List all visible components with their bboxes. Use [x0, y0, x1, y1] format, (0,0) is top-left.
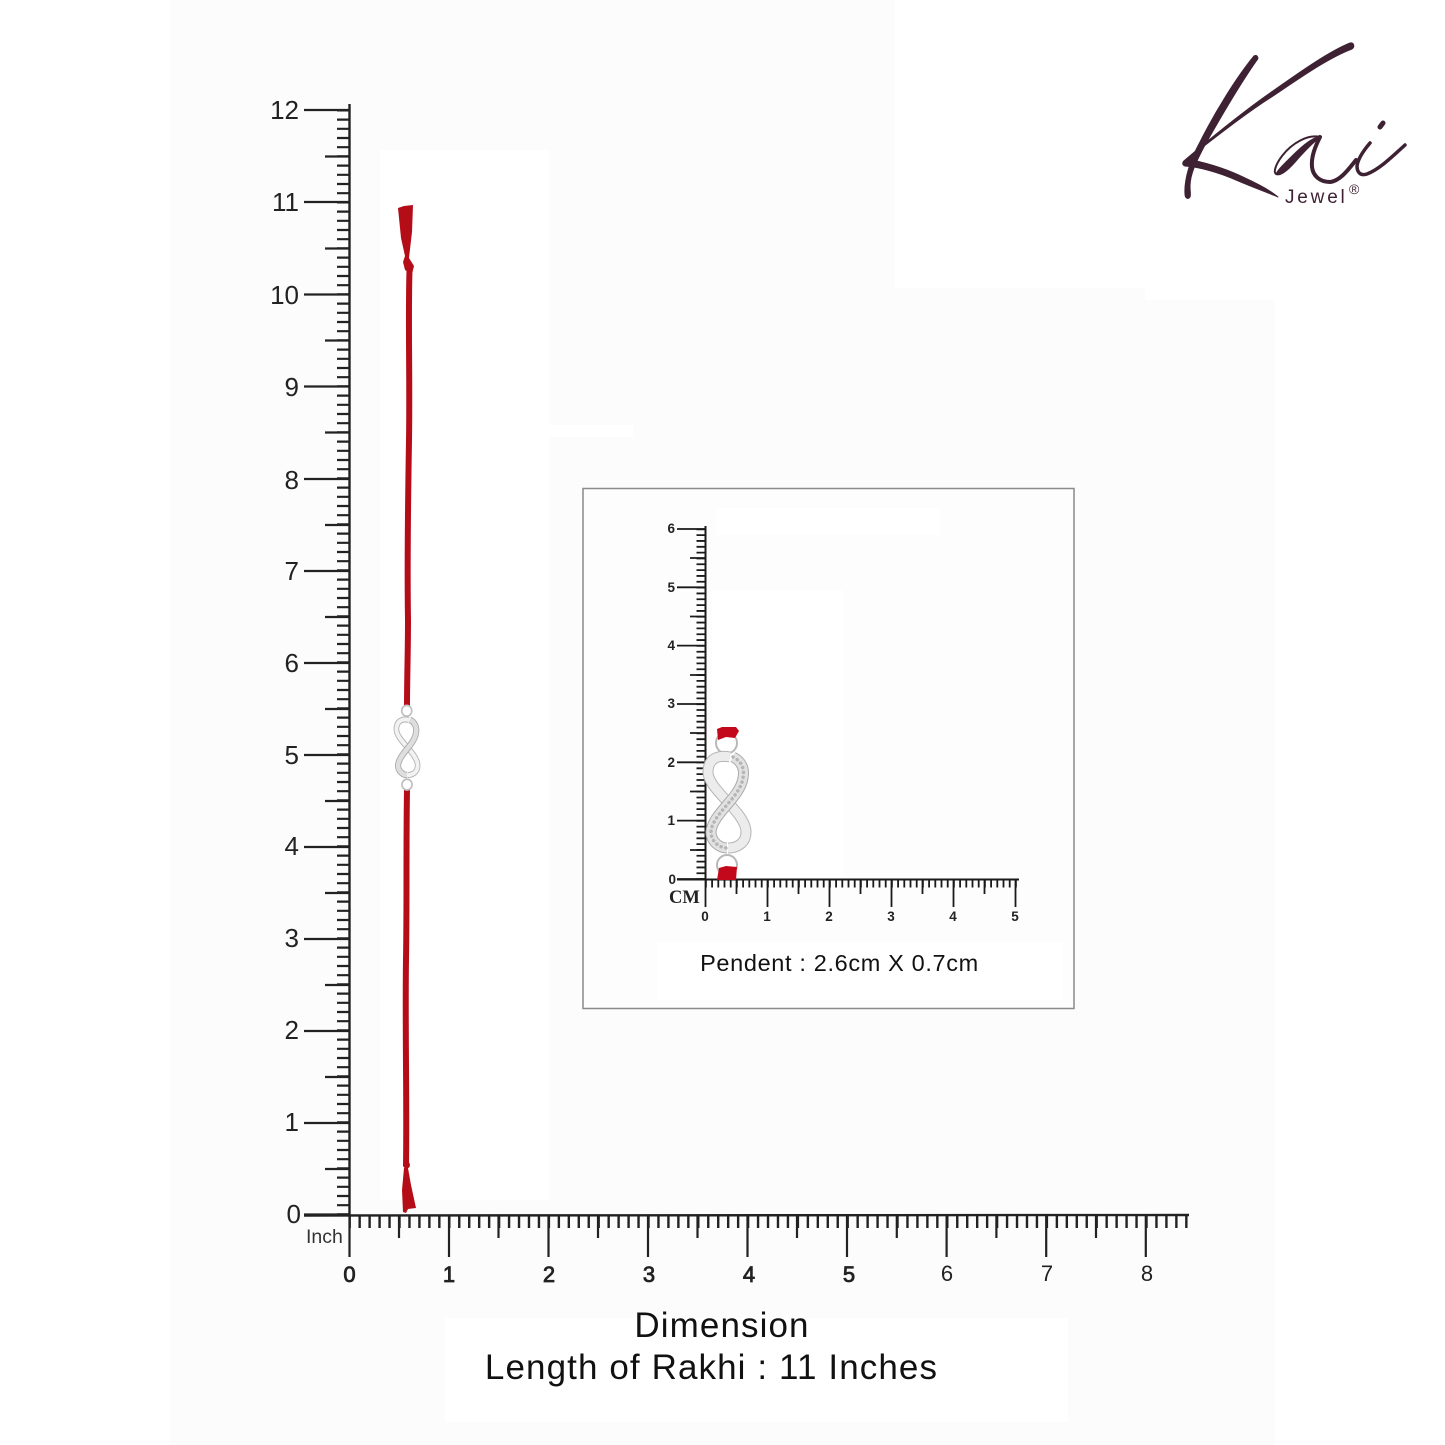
logo: Kai Jewel	[1183, 43, 1405, 208]
inch ruler: horizontal labels: 2	[543, 1262, 555, 1287]
logo: Kai Jewel: ®	[1349, 181, 1360, 197]
inch ruler: vertical labels: 8	[285, 465, 299, 495]
thread ends on large pendant	[717, 727, 739, 880]
centimetre ruler: horizontal labels: 2	[825, 909, 833, 924]
centimetre ruler: vertical labels: 2	[667, 755, 675, 770]
inch ruler: horizontal labels: 3	[643, 1262, 655, 1287]
logo: Kai Jewel: Jewel	[1285, 187, 1348, 208]
centimetre ruler: horizontal labels: 4	[949, 909, 957, 924]
inch ruler: vertical axis	[304, 104, 350, 1216]
inch ruler: vertical labels	[270, 95, 301, 1229]
inch ruler: vertical labels: 5	[285, 740, 299, 770]
inch ruler: vertical labels: 6	[285, 648, 299, 678]
inch ruler: vertical labels: 11	[272, 187, 299, 217]
inch ruler: vertical labels: 10	[270, 280, 299, 310]
caption: pendant size: Pendent : 2.6cm X 0.7cm	[700, 950, 979, 976]
red rakhi thread with pendant	[396, 205, 418, 1213]
centimetre ruler: horizontal labels: 5	[1011, 909, 1019, 924]
inch ruler: vertical labels: 0	[287, 1199, 301, 1229]
panel: pendant inset	[583, 488, 1074, 1008]
inch ruler: horizontal axis	[304, 1215, 1189, 1257]
text: rakhi length: Length of Rakhi : 11 Inches	[485, 1348, 938, 1387]
centimetre ruler: vertical labels: 5	[667, 580, 675, 595]
unit label: CM: CM	[669, 888, 700, 908]
centimetre ruler: vertical labels: 3	[667, 696, 675, 711]
inch ruler: vertical labels: 9	[285, 372, 299, 402]
inch ruler: horizontal labels: 4	[743, 1262, 755, 1287]
centimetre ruler: vertical labels: 0	[668, 872, 676, 887]
inch ruler: horizontal labels: 8	[1141, 1261, 1153, 1286]
centimetre ruler: horizontal axis	[677, 879, 1019, 907]
centimetre ruler: vertical labels	[667, 521, 676, 887]
heading: Dimension: Dimension	[634, 1306, 810, 1345]
centimetre ruler: horizontal labels: 0	[701, 909, 709, 924]
centimetre ruler: horizontal labels: 3	[887, 909, 895, 924]
centimetre ruler: vertical labels: 6	[667, 521, 675, 536]
inch ruler: horizontal labels: 0	[343, 1262, 356, 1287]
small infinity pendant	[396, 705, 418, 790]
inch ruler: vertical labels: 4	[285, 831, 299, 861]
inch ruler: horizontal labels: 6	[941, 1261, 953, 1286]
large infinity pendant	[708, 732, 746, 875]
unit label: Inch: Inch	[306, 1226, 343, 1248]
inch ruler: horizontal labels: 1	[443, 1262, 455, 1287]
inch ruler: horizontal labels	[343, 1261, 1153, 1287]
inch ruler: vertical labels: 2	[285, 1015, 299, 1045]
centimetre ruler: horizontal labels: 1	[763, 909, 771, 924]
inch ruler: horizontal labels: 5	[843, 1262, 855, 1287]
inch ruler: vertical labels: 7	[285, 556, 299, 586]
inch ruler: vertical labels: 3	[285, 923, 299, 953]
inch ruler: vertical labels: 12	[270, 95, 299, 125]
centimetre ruler: vertical axis	[677, 526, 706, 880]
inch ruler: horizontal labels: 7	[1041, 1261, 1053, 1286]
centimetre ruler: vertical labels: 1	[667, 813, 675, 828]
centimetre ruler: vertical labels: 4	[667, 638, 675, 653]
inch ruler: vertical labels: 1	[285, 1107, 299, 1137]
centimetre ruler: horizontal labels	[701, 909, 1019, 924]
